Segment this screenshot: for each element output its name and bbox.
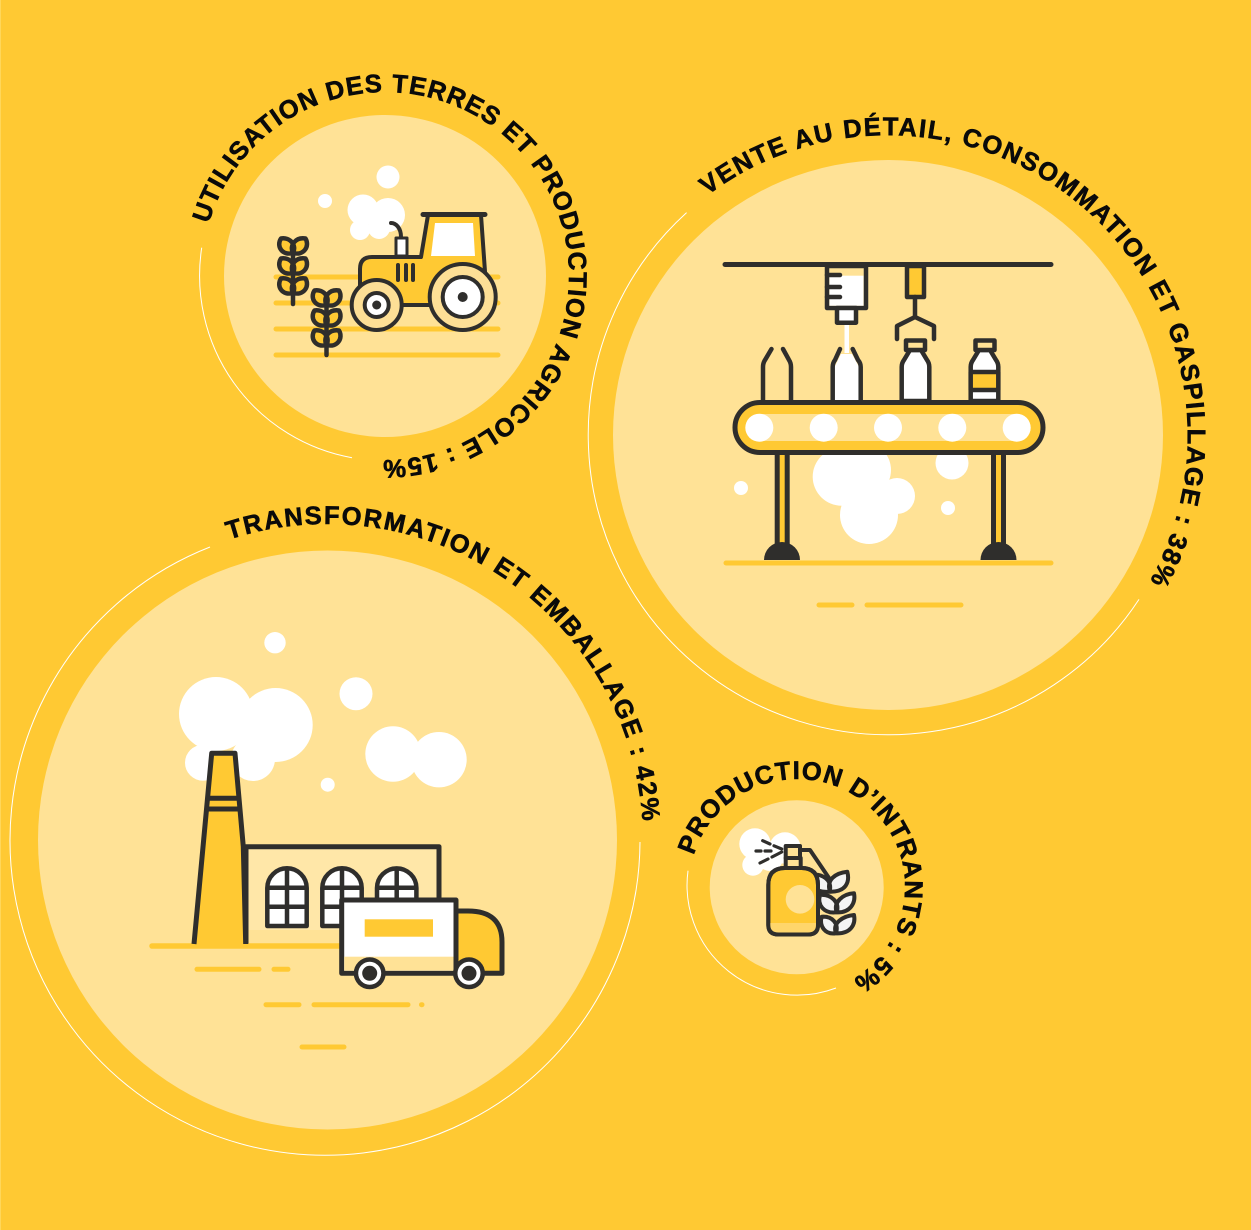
thin white arc: processing [10, 547, 640, 1155]
ground line and dashes: retail [726, 563, 1051, 605]
background circle: retail [613, 160, 1163, 710]
thin white arc: land use [200, 248, 352, 458]
icon: liquid dispenser [827, 266, 866, 353]
icon: conveyor legs [764, 452, 1016, 560]
smoke clouds: tractor [318, 166, 405, 240]
background circle: land use [224, 115, 546, 437]
background circle: inputs [710, 800, 884, 974]
panel: retail, consumption and waste [588, 112, 1206, 736]
icon: window 1 [267, 868, 307, 926]
icon: labelled bottle [971, 340, 998, 401]
icon: filled bottle with cap [902, 340, 929, 401]
icon: chimney [194, 753, 246, 944]
thin white arc: inputs [687, 871, 836, 995]
icon: bottle being filled [833, 349, 861, 401]
icon: tractor [352, 214, 496, 330]
icon: robotic gripper [897, 266, 934, 339]
curved heading: inputs: PRODUCTION D’INTRANTS : 5% [677, 761, 923, 992]
panel: land use and agricultural production [192, 74, 587, 478]
icon: conveyor belt [735, 402, 1043, 452]
smoke clouds: conveyor [734, 442, 968, 544]
ground line and dashes: processing [152, 946, 422, 1047]
background circle: processing [38, 550, 617, 1130]
curved heading: land use: UTILISATION DES TERRES ET PRODUCTION AGRICOLE : 15% [192, 74, 587, 478]
icon: wheat left [279, 238, 307, 304]
icon: delivery truck [342, 900, 502, 989]
icon: window 3 [377, 868, 416, 926]
icon: empty bottle [763, 349, 791, 401]
smoke clouds: factory [179, 632, 467, 792]
panel: processing and packaging [10, 506, 660, 1156]
icon: factory building [246, 847, 439, 944]
thin white arc: retail [588, 213, 1139, 735]
curved heading: retail: VENTE AU DÉTAIL, CONSOMMATION ET GASPILLAGE : 38% [697, 112, 1206, 586]
icon: spray droplets [756, 841, 782, 863]
icon: overhead rail [725, 262, 1051, 267]
icon: window 2 [322, 868, 362, 926]
smoke cloud: sprayer [739, 828, 801, 876]
icon: wheat right [313, 290, 341, 355]
icon: spray bottle [768, 846, 829, 934]
panel: input production [677, 761, 923, 996]
curved heading: processing: TRANSFORMATION ET EMBALLAGE : 42% [224, 506, 660, 820]
icon: plant leaves [810, 872, 854, 934]
field furrows [276, 277, 498, 355]
